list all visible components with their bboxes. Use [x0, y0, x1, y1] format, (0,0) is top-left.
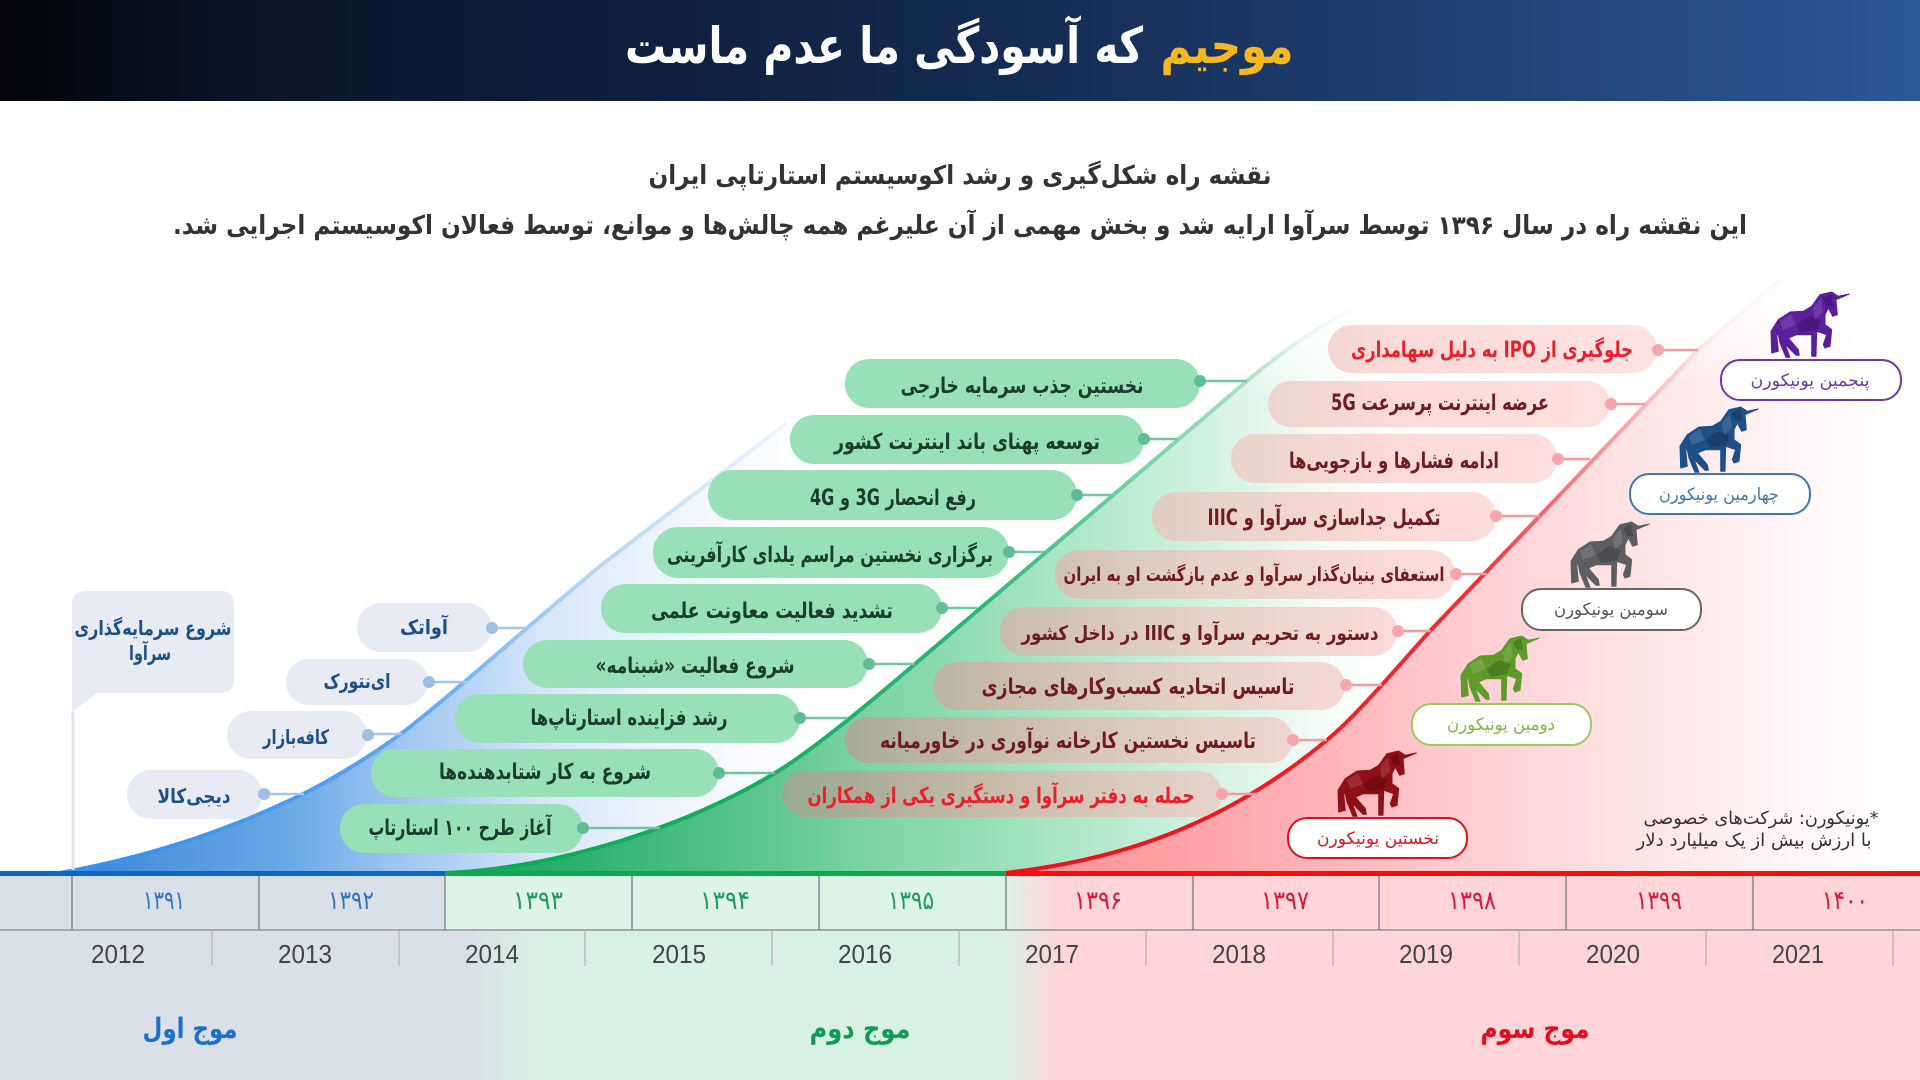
milestone: accelerators: شروع به کار شتابدهنده‌ها — [439, 760, 651, 785]
gregorian year labels: 2018 — [1212, 939, 1266, 969]
solar year labels: ۱۳۹۹ — [1636, 886, 1682, 916]
solar year labels: ۱۳۹۳ — [513, 886, 563, 916]
footnote: unicorn definition: *یونیکورن: شرکت‌های خصوصی — [1644, 808, 1878, 829]
milestone: Digikala — [127, 770, 304, 819]
badge: fifth unicorn — [1721, 360, 1901, 400]
gregorian year labels: 2020 — [1586, 939, 1640, 969]
solar year labels: ۱۳۹۲ — [328, 886, 374, 916]
icon: first unicorn — [1338, 751, 1416, 816]
milestone: science vice presidency: تشدید فعالیت معاونت علمی — [651, 599, 893, 624]
wave labels — [142, 1012, 1590, 1046]
badge: fifth unicorn: پنجمین یونیکورن — [1750, 371, 1870, 391]
milestone: IPO prevented — [1328, 325, 1698, 373]
milestone: virtual business union: تاسیس اتحادیه کسب‌وکارهای مجازی — [982, 675, 1294, 700]
solar year labels: ۱۳۹۵ — [888, 886, 934, 916]
milestone: virtual business union — [933, 662, 1382, 710]
first wave curve — [60, 423, 787, 873]
footnote: unicorn definition — [1635, 808, 1878, 851]
wave labels: موج اول — [142, 1012, 238, 1046]
solar year labels: ۱۳۹۸ — [1448, 886, 1496, 916]
milestone: 5G — [1268, 381, 1645, 427]
first wave area — [60, 423, 800, 873]
panel: third wave milestones — [782, 325, 1698, 817]
badge: second unicorn — [1412, 704, 1591, 745]
callout: start of Sarava investment — [72, 591, 234, 870]
milestone: 100 startups plan — [340, 804, 660, 853]
badge: second unicorn: دومین یونیکورن — [1447, 715, 1555, 735]
milestone: first foreign investment — [845, 359, 1247, 408]
milestone: office raid: حمله به دفتر سرآوا و دستگیری یکی از همکاران — [808, 781, 1194, 809]
description text: این نقشه راه در سال ۱۳۹۶ توسط سرآوا ارایه شد و بخش مهمی از آن علیرغم همه چالش‌ها و موانع، توسط فعالان اکوسیستم اجرایی شد. — [173, 209, 1747, 241]
gregorian year labels: 2013 — [278, 939, 332, 969]
milestone: separating Sarava and IIIC: تکمیل جداسازی سرآوا و IIIC — [1208, 503, 1440, 531]
solar year labels: ۱۴۰۰ — [1822, 886, 1868, 916]
milestone: first innovation factory: تاسیس نخستین کارخانه نوآوری در خاورمیانه — [880, 726, 1256, 754]
milestone: Digikala: دیجی‌کالا — [158, 784, 230, 808]
panel: first wave milestones — [72, 591, 527, 870]
gregorian year labels: 2014 — [465, 939, 519, 969]
milestone: startup growth — [455, 694, 848, 743]
gregorian year labels: 2017 — [1025, 939, 1079, 969]
milestone: accelerators — [371, 749, 775, 797]
milestone: 5G: عرضه اینترنت پرسرعت 5G — [1331, 391, 1549, 416]
milestone: broadband development — [790, 415, 1178, 464]
milestone: boycott order — [1000, 607, 1431, 656]
milestone: Cafe Bazaar: کافه‌بازار — [262, 725, 329, 749]
callout: start of Sarava investment: شروع سرمایه‌گذاری — [74, 616, 232, 640]
panel: unicorns — [1288, 292, 1901, 858]
milestone: IPO prevented: جلوگیری از IPO به دلیل سهامداری — [1351, 336, 1633, 363]
icon: fifth unicorn — [1771, 292, 1849, 357]
gregorian year labels: 2021 — [1772, 939, 1824, 969]
second wave area — [492, 348, 1336, 871]
milestone: broadband development: توسعه پهنای باند اینترنت کشور — [833, 430, 1100, 455]
chart: three wave growth curves — [60, 280, 1920, 873]
timeline band — [0, 871, 1920, 1080]
milestone: continued pressure — [1231, 434, 1590, 483]
second wave curve — [445, 305, 1360, 873]
badge: fourth unicorn — [1630, 474, 1810, 514]
solar year labels: ۱۳۹۴ — [700, 886, 750, 916]
panel: second wave milestones — [340, 359, 1247, 853]
milestone: first innovation factory — [845, 717, 1327, 763]
wave labels: موج سوم — [1480, 1012, 1590, 1046]
third wave area — [1036, 332, 1812, 871]
solar year labels: ۱۳۹۷ — [1261, 886, 1309, 916]
milestone: office raid — [782, 771, 1258, 817]
subtitle heading: نقشه راه شکل‌گیری و رشد اکوسیستم استارتاپی ایران — [648, 160, 1272, 191]
milestone: separating Sarava and IIIC — [1152, 492, 1540, 541]
milestone: ending 3G and 4G monopoly — [708, 470, 1113, 520]
title: که آسودگی ما عدم ماست — [625, 15, 1144, 76]
milestone: Avatech: آواتک — [400, 614, 449, 639]
solar year labels: ۱۳۹۱ — [143, 886, 185, 916]
badge: third unicorn — [1522, 589, 1701, 630]
gregorian year labels — [91, 939, 1824, 969]
gregorian year labels: 2016 — [838, 939, 892, 969]
badge: first unicorn: نخستین یونیکورن — [1317, 829, 1439, 849]
milestone: science vice presidency — [601, 584, 977, 633]
gregorian year labels: 2012 — [91, 939, 145, 969]
wave labels: موج دوم — [810, 1012, 910, 1046]
milestone: Enetwork — [286, 659, 468, 705]
badge: first unicorn — [1288, 818, 1467, 858]
header banner — [0, 0, 1920, 101]
milestone: continued pressure: ادامه فشارها و بازجویی‌ها — [1289, 449, 1499, 474]
title: موجیم — [1160, 17, 1294, 76]
milestone: boycott order: دستور به تحریم سرآوا و IIIC در داخل کشور — [1021, 620, 1378, 645]
milestone: 100 startups plan: آغاز طرح ۱۰۰ استارتاپ — [368, 813, 552, 841]
milestone: first Yalda ceremony: برگزاری نخستین مراسم یلدای کارآفرینی — [667, 540, 993, 568]
milestone: Shabnameh — [523, 640, 915, 688]
icon: third unicorn — [1571, 522, 1649, 587]
milestone: Enetwork: ای‌نتورک — [324, 669, 390, 693]
icon: fourth unicorn — [1680, 407, 1758, 472]
milestone: founder resignation — [1055, 550, 1487, 599]
solar year labels: ۱۳۹۶ — [1074, 886, 1122, 916]
milestone: founder resignation: استعفای بنیان‌گذار سرآوا و عدم بازگشت او به ایران — [1064, 562, 1444, 586]
solar year labels — [143, 886, 1868, 916]
milestone: first foreign investment: نخستین جذب سرمایه خارجی — [900, 374, 1144, 399]
milestone: Shabnameh: شروع فعالیت «شبنامه» — [596, 654, 794, 679]
gregorian year labels: 2019 — [1399, 939, 1453, 969]
milestone: Cafe Bazaar — [227, 711, 402, 759]
milestone: startup growth: رشد فزاینده استارتاپ‌ها — [530, 706, 728, 731]
milestone: Avatech — [357, 603, 527, 652]
footnote: unicorn definition: با ارزش بیش از یک میلیارد دلار — [1635, 830, 1872, 851]
milestone: ending 3G and 4G monopoly: رفع انحصار 3G و 4G — [810, 486, 976, 511]
third wave curve — [1005, 280, 1780, 873]
callout: start of Sarava investment: سرآوا — [129, 640, 171, 665]
milestone: first Yalda ceremony — [653, 527, 1044, 578]
gregorian year labels: 2015 — [652, 939, 706, 969]
icon: second unicorn — [1461, 636, 1539, 701]
badge: fourth unicorn: چهارمین یونیکورن — [1659, 485, 1779, 505]
badge: third unicorn: سومین یونیکورن — [1554, 600, 1668, 620]
